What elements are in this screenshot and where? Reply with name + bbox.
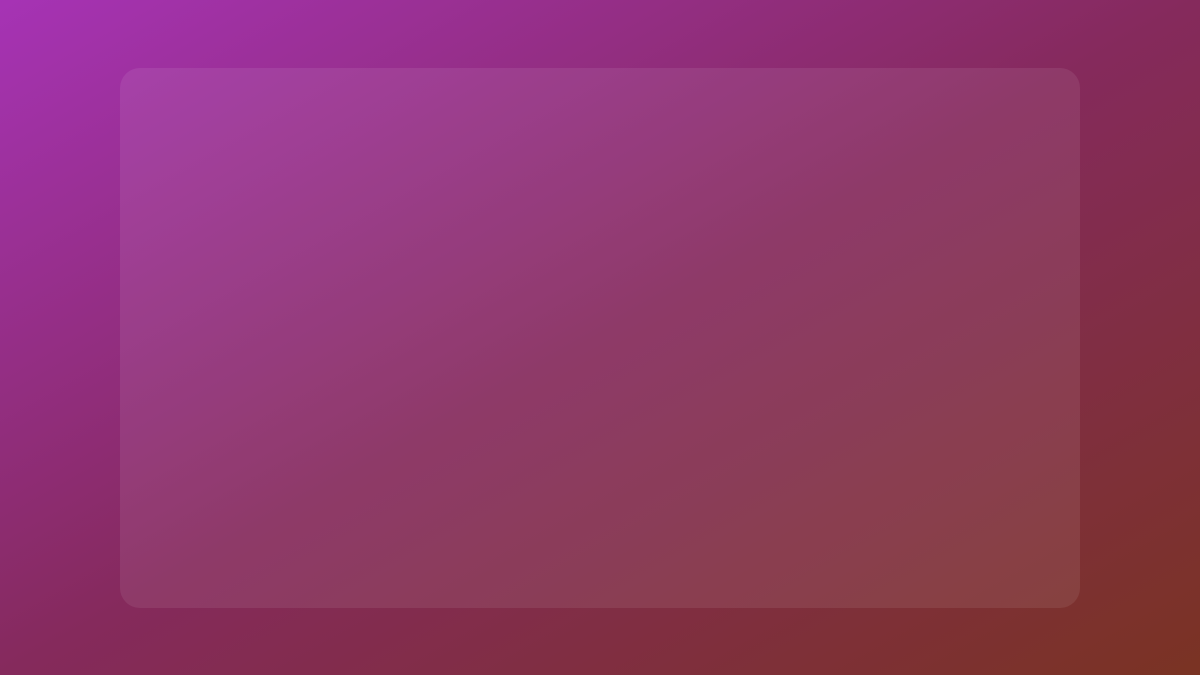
panel: translucent card bbox=[120, 68, 1080, 608]
